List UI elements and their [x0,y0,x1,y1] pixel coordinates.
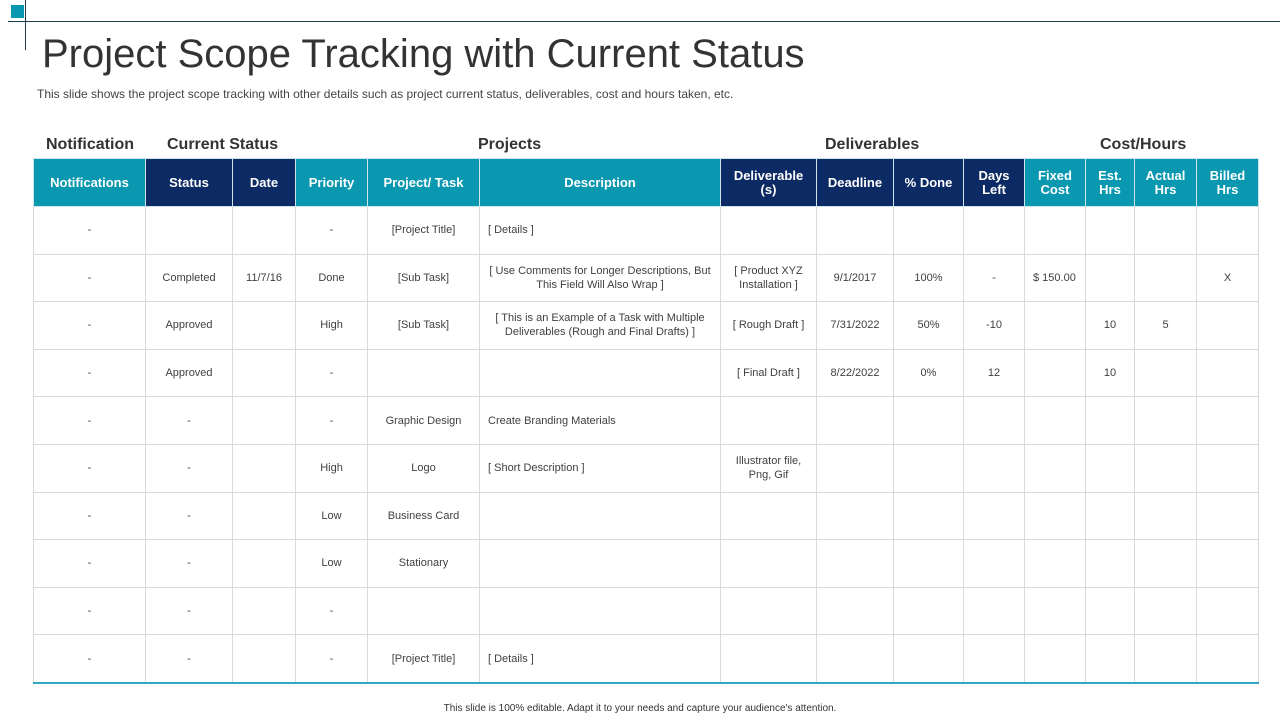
table: project tracking: [ Use Comments for Longer Descriptions, But This Field Will Also Wrap ] [489,265,711,291]
table: project tracking: -10 [986,319,1002,331]
table: project tracking: [ Details ] [488,653,534,665]
table: project tracking: - [330,605,333,617]
group headings: Deliverables [825,136,919,153]
table: project tracking: Notifications [50,174,129,190]
table: project tracking: Approved [165,367,213,379]
table: project tracking: Fixed Cost [1038,168,1072,196]
table: project tracking: [Project Title] [392,653,455,665]
table: project tracking: Approved [165,319,213,331]
table: project tracking: Days Left [978,168,1010,196]
table: project tracking: Logo [411,462,436,474]
table: project tracking: Billed Hrs [1210,168,1245,196]
table: project tracking: [ This is an Example of a Task with Multiple Deliverables (Rough and Final Drafts) ] [495,312,705,338]
table: project tracking: Business Card [388,510,459,522]
table: project tracking: Stationary [399,557,448,569]
table: project tracking: - [187,415,191,427]
table: project tracking: - [187,510,191,522]
table: project tracking: Deadline [828,174,882,190]
table: project tracking: 10 [1104,319,1116,331]
subtitle: This slide shows the project scope tracking with other details such as project current status, deliverables, cost and hours taken, etc. [37,87,733,101]
table: project tracking: 5 [1162,319,1169,331]
table: project tracking: - [187,462,191,474]
table: project tracking: - [330,653,333,665]
table: project tracking: [ Rough Draft ] [733,319,804,331]
table: project tracking: Illustrator file, Png, Gif [736,455,801,481]
table: project tracking: - [88,653,91,665]
table: project tracking: - [992,272,996,284]
table: project tracking: - [88,367,91,379]
table: project tracking: 12 [988,367,1000,379]
table: project tracking: Deliverable (s) [734,168,803,196]
table: project tracking: [ Final Draft ] [737,367,800,379]
table: project tracking: 50% [917,319,940,331]
group headings: Notification [46,136,134,153]
table: project tracking: High [320,319,343,331]
table: project tracking: [ Details ] [488,224,534,236]
table: project tracking: Low [321,557,342,569]
table: project tracking: Description [564,174,636,190]
table: project tracking: [Sub Task] [398,272,449,284]
table: project tracking: Status [169,174,209,190]
table: project tracking: - [187,557,191,569]
table: project tracking: Date [250,174,278,190]
footer note: This slide is 100% editable. Adapt it to your needs and capture your audience's attention. [444,703,836,714]
group headings: Cost/Hours [1100,136,1186,153]
decoration: header line [8,21,1280,22]
table: project tracking: 9/1/2017 [834,272,876,284]
decoration: corner square [11,5,24,18]
table: project tracking [33,158,1259,684]
table: project tracking: - [187,605,191,617]
table: project tracking: 8/22/2022 [831,367,879,379]
table: project tracking: $ 150.00 [1033,272,1076,284]
table: project tracking: - [88,224,91,236]
title: Project Scope Tracking with Current Status [42,32,805,76]
table: project tracking: X [1224,272,1231,284]
table: project tracking: [ Short Description ] [488,462,585,474]
table: project tracking: 100% [914,272,943,284]
table: project tracking: - [88,415,91,427]
table: project tracking: - [88,605,91,617]
table: project tracking: [ Product XYZ Installation ] [734,265,803,291]
table: project tracking: % Done [905,174,952,190]
table: project tracking: Done [318,272,345,284]
table: project tracking: Priority [309,174,354,190]
table: project tracking: 0% [921,367,936,379]
table: project tracking: - [330,224,333,236]
group headings [46,136,1186,153]
table: project tracking: - [88,557,91,569]
table: project tracking: Low [321,510,342,522]
table: project tracking: - [88,319,91,331]
table: project tracking: Graphic Design [386,415,461,427]
table: project tracking: - [88,272,91,284]
table: project tracking: Actual Hrs [1146,168,1185,196]
table: project tracking: - [88,462,91,474]
group headings: Current Status [167,136,278,153]
table: project tracking: Project/ Task [384,174,463,190]
table: project tracking: - [330,415,333,427]
table: project tracking: High [320,462,343,474]
table: project tracking: - [187,653,191,665]
table: project tracking: 7/31/2022 [831,319,879,331]
table: project tracking: [Sub Task] [398,319,449,331]
table: project tracking: Est. Hrs [1098,168,1122,196]
table: project tracking: - [88,510,91,522]
table: project tracking: Create Branding Materials [488,415,616,427]
table: project tracking: 10 [1104,367,1116,379]
table: project tracking: [Project Title] [392,224,455,236]
table: project tracking: 11/7/16 [246,272,282,284]
table: project tracking: - [330,367,333,379]
table: project tracking: Completed [162,272,216,284]
group headings: Projects [478,136,541,153]
